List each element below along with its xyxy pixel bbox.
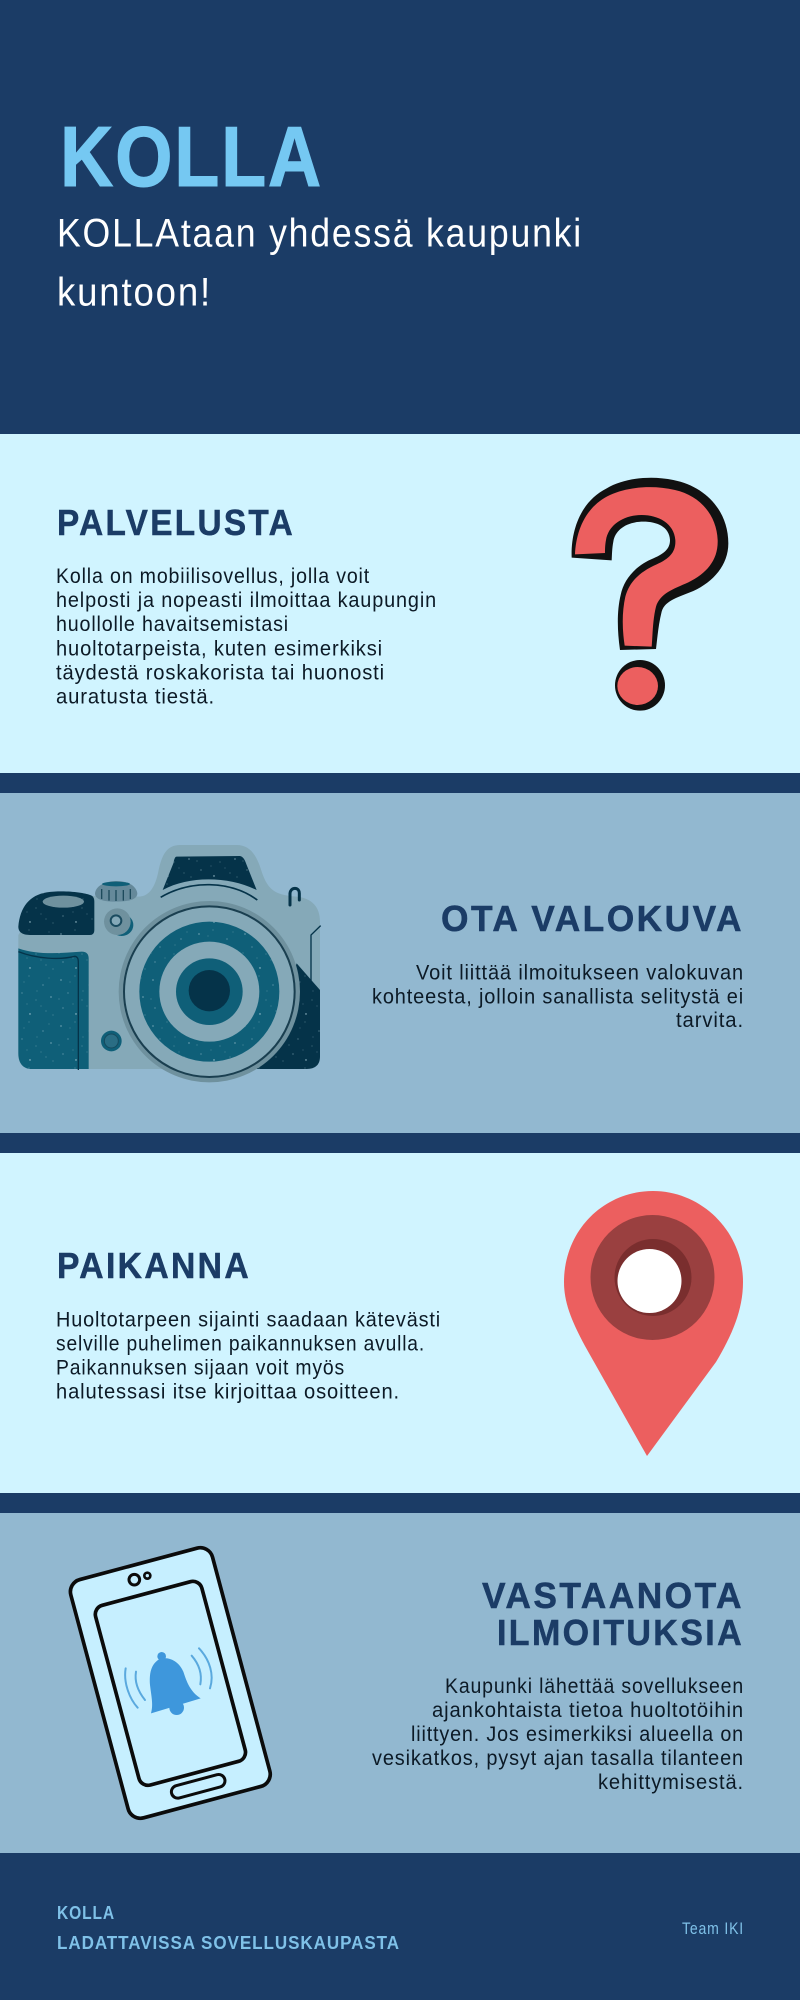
panel: paikanna xyxy=(0,1153,800,1493)
title: KOLLA xyxy=(60,110,323,205)
panel: footer xyxy=(0,1853,800,2000)
text: paikanna: selville puhelimen paikannuksen avulla. xyxy=(56,1332,425,1356)
text: vastaanota ilmoituksia xyxy=(372,1675,744,1794)
text: palvelusta: huoltotarpeista, kuten esimerkiksi xyxy=(56,638,383,660)
footer: app store note xyxy=(57,1903,400,1953)
footer: team name: Team IKI xyxy=(682,1919,744,1938)
text: ota valokuva xyxy=(372,962,744,1032)
heading: paikanna: PAIKANNA xyxy=(57,1245,251,1286)
text: vastaanota ilmoituksia: ajankohtaista tietoa huoltotöihin xyxy=(432,1699,744,1722)
heading: vastaanota ilmoituksia: VASTAANOTA xyxy=(482,1575,744,1616)
panel: vastaanota ilmoituksia xyxy=(0,1513,800,1853)
text: vastaanota ilmoituksia: vesikatkos, pysyt ajan tasalla tilanteen xyxy=(372,1747,744,1770)
icon: camera xyxy=(18,845,321,1082)
text: ota valokuva: kohteesta, jolloin sanallista selitystä ei xyxy=(372,986,744,1008)
subtitle xyxy=(57,212,583,314)
text: palvelusta: helposti ja nopeasti ilmoittaa kaupungin xyxy=(56,589,437,612)
icon: phone with bell xyxy=(68,1545,273,1821)
heading: ota valokuva: OTA VALOKUVA xyxy=(441,898,744,939)
icon: question mark xyxy=(572,478,728,711)
text: paikanna: halutessasi itse kirjoittaa osoitteen. xyxy=(56,1380,400,1404)
text: ota valokuva: tarvita. xyxy=(676,1009,744,1032)
text: palvelusta: täydestä roskakorista tai huonosti xyxy=(56,662,385,684)
text: paikanna: Huoltotarpeen sijainti saadaan kätevästi xyxy=(56,1308,441,1332)
panel: ota valokuva xyxy=(0,793,800,1133)
footer: app store note: KOLLA xyxy=(57,1903,115,1923)
heading: vastaanota ilmoituksia xyxy=(482,1575,744,1653)
text: ota valokuva: Voit liittää ilmoitukseen valokuvan xyxy=(416,962,744,984)
text: palvelusta: Kolla on mobiilisovellus, jolla voit xyxy=(56,565,370,588)
text: palvelusta: huollolle havaitsemistasi xyxy=(56,613,289,636)
subtitle: kuntoon! xyxy=(57,270,212,314)
text: paikanna: Paikannuksen sijaan voit myös xyxy=(56,1356,345,1380)
icon: map pin xyxy=(564,1191,743,1456)
text: vastaanota ilmoituksia: kehittymisestä. xyxy=(598,1771,744,1794)
text: vastaanota ilmoituksia: liittyen. Jos esimerkiksi alueella on xyxy=(411,1723,744,1746)
panel: header xyxy=(0,0,800,434)
heading: palvelusta: PALVELUSTA xyxy=(57,502,295,543)
text: palvelusta xyxy=(56,565,437,708)
text: paikanna xyxy=(56,1308,441,1404)
subtitle: KOLLAtaan yhdessä kaupunki xyxy=(57,212,583,256)
panel: palvelusta xyxy=(0,434,800,773)
footer: app store note: LADATTAVISSA SOVELLUSKAUPASTA xyxy=(57,1933,400,1953)
heading: vastaanota ilmoituksia: ILMOITUKSIA xyxy=(497,1612,744,1653)
text: palvelusta: auratusta tiestä. xyxy=(56,686,215,708)
text: vastaanota ilmoituksia: Kaupunki lähettää sovellukseen xyxy=(445,1675,744,1698)
